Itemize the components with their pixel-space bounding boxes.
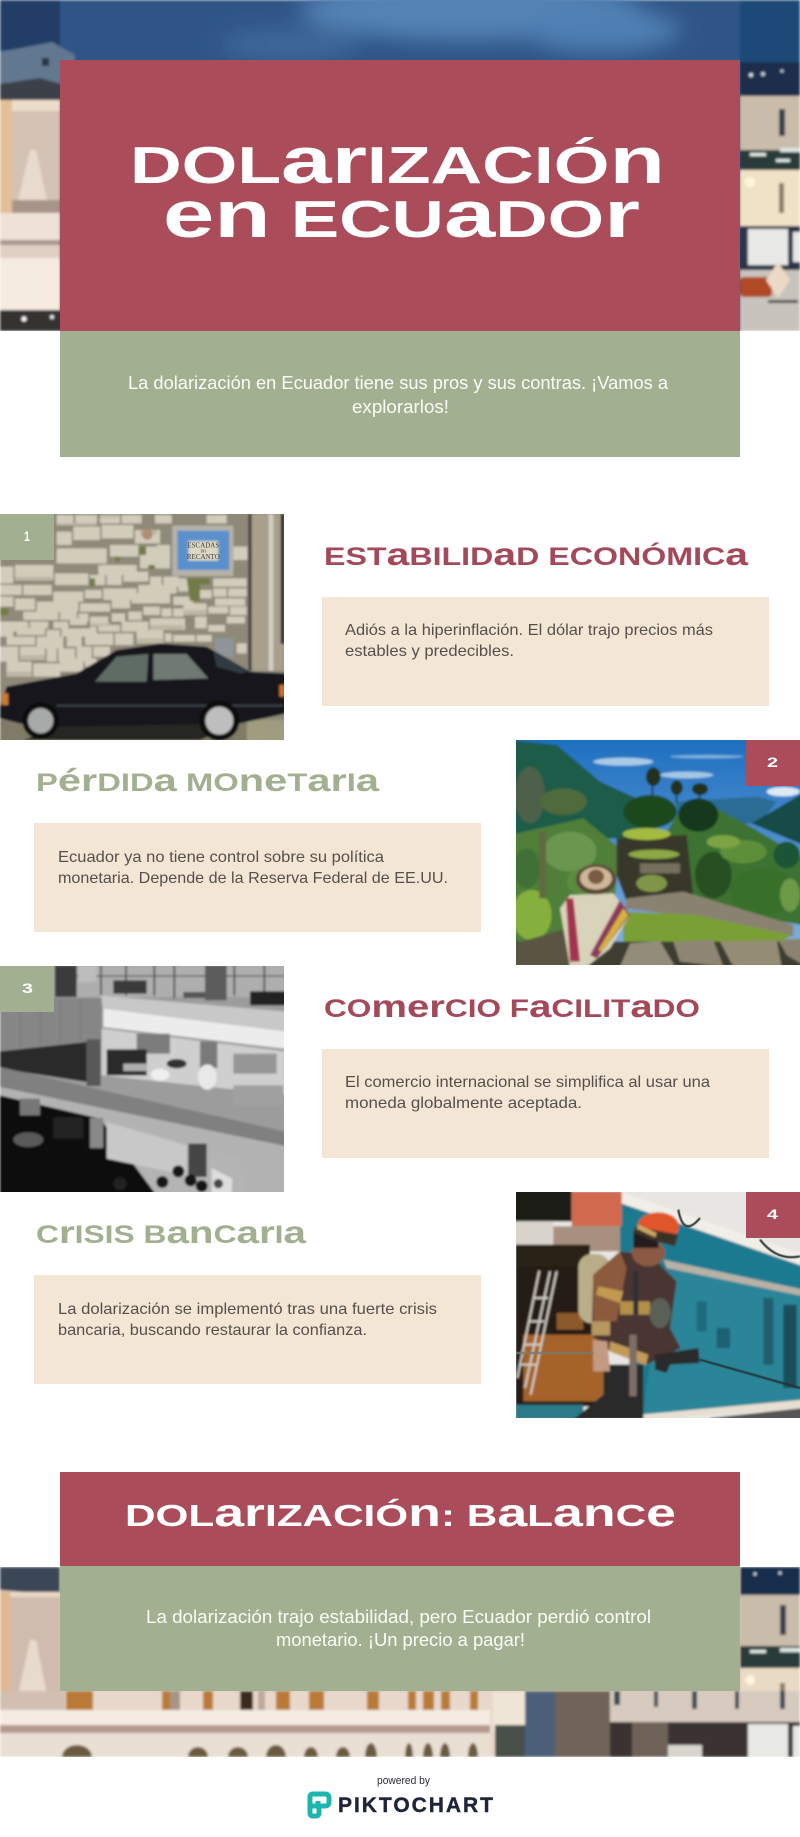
closing text panel: La dolarización trajo estabilidad, pero Ecuador perdió control: [146, 1607, 651, 1627]
section 1 text panel: estables y predecibles.: [345, 643, 514, 660]
hero photo: night view of a colonial building: [0, 0, 800, 331]
closing text panel: monetario. ¡Un precio a pagar!: [276, 1630, 525, 1650]
section 3 text panel: El comercio internacional se simplifica al usar una: [345, 1074, 710, 1091]
title heading: en ECU a DO r: [163, 177, 640, 251]
intro text: [128, 373, 669, 417]
section 1 text panel: Adiós a la hiperinflación. El dólar trajo precios más: [345, 622, 713, 639]
section 2 text panel: [34, 823, 481, 932]
closing title panel: [60, 1472, 740, 1566]
badge 4: [746, 1192, 800, 1238]
photo 4: firefighter with hose beside a teal wall: [510, 1188, 800, 1421]
badge 3: [0, 966, 54, 1012]
footer logo: powered by Piktochart: [310, 1775, 493, 1817]
footer logo: powered by Piktochart: PIKTOCHART: [338, 1794, 493, 1817]
section 1 heading: EST aBILID aD ECONÓMIC a: [324, 536, 748, 572]
section 1 text panel: [322, 597, 769, 706]
section 3 text panel: moneda globalmente aceptada.: [345, 1095, 582, 1112]
section 2 text panel: Ecuador ya no tiene control sobre su política: [58, 849, 384, 866]
photo 3: black and white interior of a multi-level atrium: [0, 962, 290, 1195]
section 2 text panel: monetaria. Depende de la Reserva Federal de EE.UU.: [58, 870, 448, 887]
intro panel: [60, 331, 740, 457]
title panel: [60, 60, 740, 331]
plaque lettering: ESCADAS: [187, 542, 219, 550]
section 4 text panel: bancaria, buscando restaurar la confianza.: [58, 1322, 367, 1339]
title heading: [130, 123, 665, 251]
badge 1: 1: [24, 528, 30, 544]
badge 1: [0, 514, 54, 560]
section 4 heading: CrISIS B an Car Ia: [36, 1214, 306, 1250]
closing text panel: [60, 1566, 740, 1691]
title heading: DOL ar IZACIÓ n: [130, 123, 665, 197]
footer logo: powered by Piktochart: powered by: [377, 1775, 430, 1787]
badge 2: 2: [767, 754, 778, 770]
section 4 text panel: [34, 1275, 481, 1384]
plaque lettering: RECANTO: [187, 553, 220, 561]
photo 2: terraces in a jungle valley with seated person: [510, 735, 800, 968]
bottom photo: colonial palace facade at dusk: [0, 1567, 800, 1757]
icon: Piktochart mark: [310, 1794, 329, 1816]
section 3 text panel: [322, 1049, 769, 1158]
intro text: explorarlos!: [352, 397, 449, 417]
section 2 heading: PérDID a MO ne Tar Ia: [36, 762, 379, 798]
badge 4: 4: [767, 1206, 778, 1222]
badge 2: [746, 740, 800, 786]
badge 3: 3: [22, 980, 33, 996]
section 3 heading: CO mer CIO F aCILIT aDO: [324, 988, 700, 1024]
intro text: La dolarización en Ecuador tiene sus pros y sus contras. ¡Vamos a: [128, 373, 669, 393]
plaque lettering: DO: [200, 549, 206, 554]
plaque lettering: [187, 542, 220, 559]
photo 1: car parked by a stone wall: [0, 510, 290, 743]
closing title panel: DOL ar IZACIÓ n : B a Lan Ce: [125, 1491, 676, 1535]
section 4 text panel: La dolarización se implementó tras una fuerte crisis: [58, 1301, 437, 1318]
